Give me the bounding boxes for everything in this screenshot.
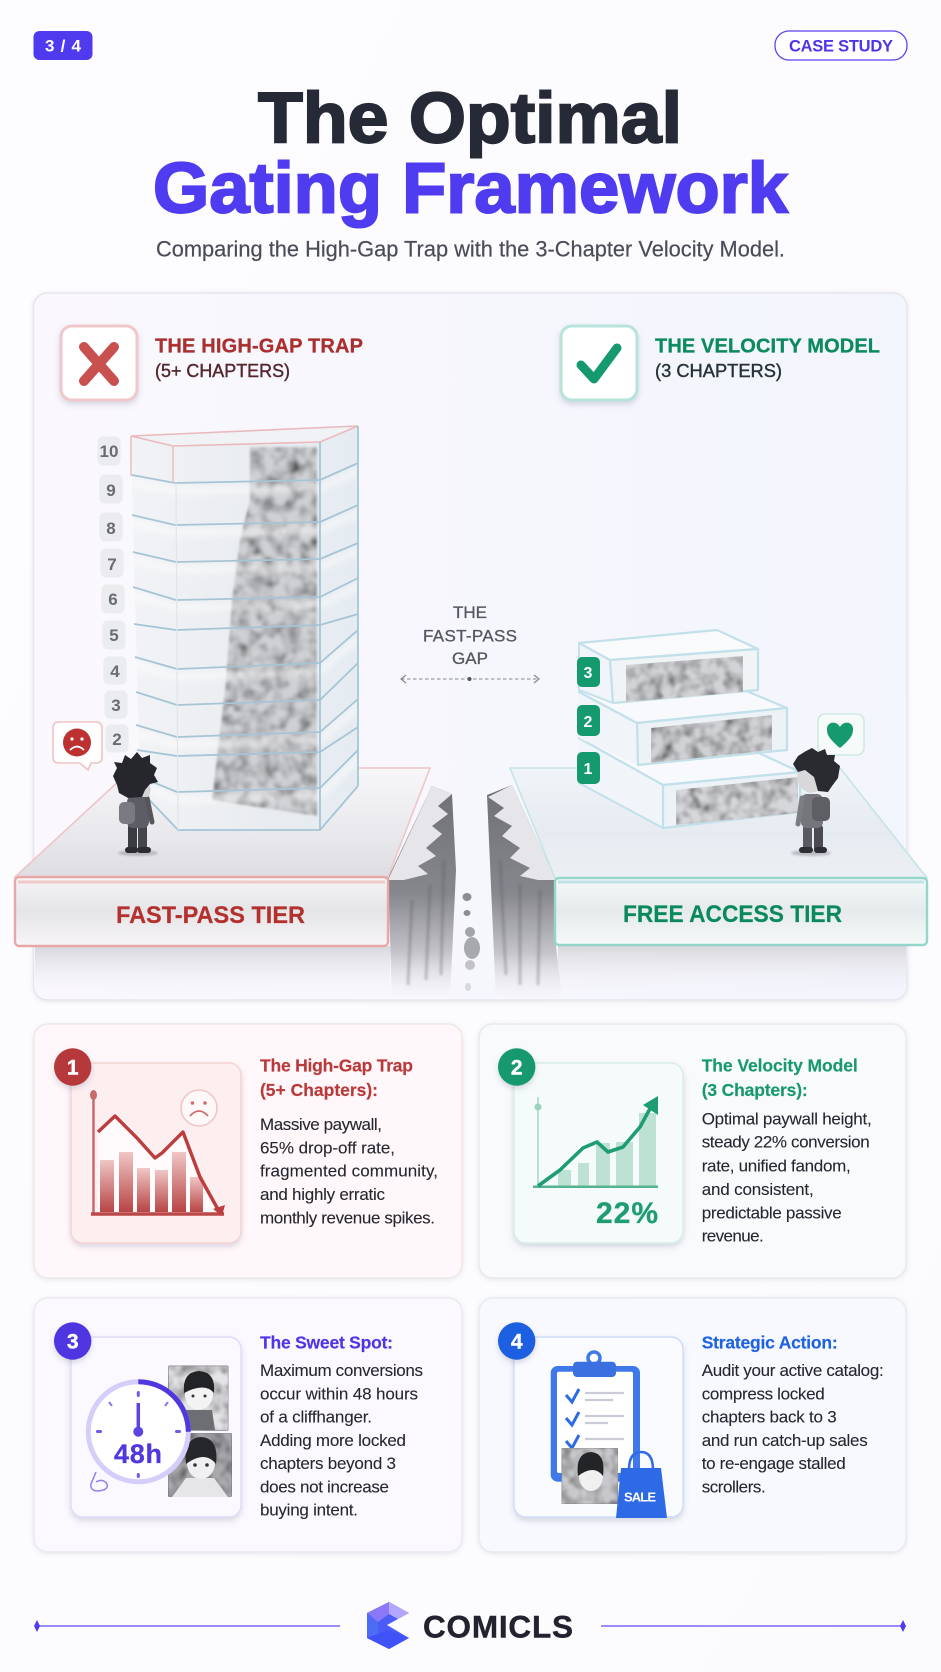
icon panel: clipboard and sale bag <box>514 1337 683 1518</box>
card 2 text: (3 Chapters): <box>702 1080 808 1100</box>
number badge 1 <box>54 1048 91 1086</box>
footer line left <box>34 1620 340 1632</box>
manga portrait upper <box>168 1366 228 1431</box>
card 3 text: Maximum conversions <box>260 1361 423 1380</box>
card 3 text: of a cliffhanger. <box>260 1408 372 1427</box>
card 2 text: The Velocity Model <box>702 1056 858 1076</box>
icon panel: rising chart <box>514 1063 683 1243</box>
sale bag <box>616 1452 667 1518</box>
character: reader at the stairs <box>791 748 840 856</box>
number badge 3 <box>54 1322 91 1360</box>
number badge 1: 1 <box>67 1056 79 1080</box>
gap label: THE <box>453 603 487 622</box>
card 1 text: 65% drop-off rate, <box>260 1138 395 1157</box>
card 2 text: steady 22% conversion <box>702 1133 870 1152</box>
icon panel: 48h clock and manga panels <box>71 1337 241 1517</box>
card 3 text: does not increase <box>260 1477 389 1496</box>
heading: high-gap trap: THE HIGH-GAP TRAP <box>155 336 363 358</box>
icon panel: 48h clock and manga panels: 48h <box>114 1439 162 1469</box>
step 2 <box>579 680 787 765</box>
card 2 text: predictable passive <box>702 1203 842 1222</box>
card 1 text: fragmented community, <box>260 1162 438 1181</box>
left platform: fast-pass tier: FAST-PASS TIER <box>116 902 305 929</box>
tag: case study: CASE STUDY <box>789 38 893 56</box>
number badge 2 <box>498 1048 535 1086</box>
heading: velocity model: THE VELOCITY MODEL <box>655 336 880 358</box>
number badge 2: 2 <box>511 1056 523 1080</box>
heading: velocity model <box>655 336 880 381</box>
card 4: strategic action <box>479 1298 906 1552</box>
footer line right <box>601 1620 906 1632</box>
card 1 text <box>260 1056 438 1227</box>
title: Gating Framework <box>153 150 789 228</box>
icon: red cross <box>61 326 137 400</box>
glass tower of ten chapter slabs <box>131 426 358 830</box>
card 4 text: and run catch-up sales <box>702 1431 868 1450</box>
card 2 text: Optimal paywall height, <box>702 1109 872 1128</box>
right platform: free access tier: FREE ACCESS TIER <box>623 901 842 928</box>
card 2 text: revenue. <box>702 1227 764 1246</box>
card 3 text: occur within 48 hours <box>260 1384 418 1403</box>
card 4 text: scrollers. <box>702 1477 766 1496</box>
card 2 text <box>702 1056 872 1246</box>
chapter number labels 2 to 10: 5 <box>109 626 119 645</box>
chapter number labels 2 to 10 <box>97 436 129 753</box>
title: The Optimal <box>258 80 682 158</box>
card 3 text <box>260 1332 423 1520</box>
title <box>153 80 789 228</box>
brand name: COMICLS <box>423 1609 573 1645</box>
step 3 <box>579 630 758 703</box>
panel: comparison <box>15 293 927 1000</box>
falling rocks in the gap <box>462 893 480 991</box>
sale bag: SALE <box>624 1490 656 1505</box>
card 1 text: monthly revenue spikes. <box>260 1208 435 1227</box>
card 4 text: Audit your active catalog: <box>702 1361 884 1380</box>
manga portrait <box>562 1448 618 1504</box>
card 1: high-gap trap <box>34 1024 462 1278</box>
gap label <box>423 603 517 668</box>
icon: green check <box>561 326 637 400</box>
cliff right <box>487 785 562 1000</box>
card 3 text: Adding more locked <box>260 1431 406 1450</box>
subtitle: Comparing the High-Gap Trap with the 3-Chapter Velocity Model. <box>156 237 785 262</box>
green chapter labels 1 to 3: 1 <box>584 761 593 778</box>
card 1 text: (5+ Chapters): <box>260 1080 378 1100</box>
card 1 text: Massive paywall, <box>260 1115 382 1134</box>
arrow: gap width <box>401 675 539 683</box>
heading: high-gap trap <box>155 336 363 381</box>
card 2 text: and consistent, <box>702 1180 814 1199</box>
card 2: velocity model <box>479 1024 906 1278</box>
heading: velocity model: (3 CHAPTERS) <box>655 361 782 381</box>
card 3 text: buying intent. <box>260 1501 358 1520</box>
card 1 text: and highly erratic <box>260 1185 386 1204</box>
manga portrait lower <box>168 1433 232 1497</box>
card 1 text: The High-Gap Trap <box>260 1056 413 1076</box>
chapter number labels 2 to 10: 10 <box>100 442 118 461</box>
card 3 text: chapters beyond 3 <box>260 1454 396 1473</box>
gap label: GAP <box>452 649 488 668</box>
chapter number labels 2 to 10: 2 <box>112 730 122 749</box>
icon panel: falling chart <box>71 1063 241 1243</box>
cliff left <box>388 786 456 1000</box>
green chapter labels 1 to 3: 2 <box>584 714 593 731</box>
card 2 text: rate, unified fandom, <box>702 1157 851 1176</box>
card 4 text: chapters back to 3 <box>702 1408 837 1427</box>
tag: case study <box>775 31 907 60</box>
right platform: free access tier <box>487 768 927 1000</box>
chapter number labels 2 to 10: 4 <box>110 662 120 681</box>
gap label: FAST-PASS <box>423 627 517 646</box>
chapter number labels 2 to 10: 3 <box>111 696 121 715</box>
card 4 text: to re-engage stalled <box>702 1454 846 1473</box>
left platform: fast-pass tier <box>15 768 456 1000</box>
speech bubble: heart <box>818 714 864 755</box>
chapter number labels 2 to 10: 7 <box>107 555 117 574</box>
glass stairs of three chapters <box>579 630 800 828</box>
chapter number labels 2 to 10: 6 <box>108 590 118 609</box>
logo mark <box>367 1602 409 1649</box>
card 4 text <box>702 1332 884 1496</box>
speech bubble: sad face <box>53 722 102 770</box>
chapter number labels 2 to 10: 8 <box>106 519 116 538</box>
step 1 <box>579 735 800 828</box>
number badge 4 <box>498 1322 535 1360</box>
green chapter labels 1 to 3 <box>577 657 600 784</box>
card 4 text: Strategic Action: <box>702 1332 838 1352</box>
icon panel: rising chart: 22% <box>596 1197 658 1230</box>
page badge: 3 / 4 <box>34 31 92 60</box>
number badge 4: 4 <box>511 1330 523 1354</box>
chapter number labels 2 to 10: 9 <box>106 481 116 500</box>
page badge: 3 / 4: 3 / 4 <box>45 37 82 56</box>
card 4 text: compress locked <box>702 1384 825 1403</box>
heading: high-gap trap: (5+ CHAPTERS) <box>155 361 290 381</box>
card 3 text: The Sweet Spot: <box>260 1332 393 1352</box>
card 3: sweet spot <box>34 1298 462 1552</box>
number badge 3: 3 <box>67 1330 79 1354</box>
green chapter labels 1 to 3: 3 <box>584 665 593 682</box>
character: reader at the tower <box>113 752 158 856</box>
